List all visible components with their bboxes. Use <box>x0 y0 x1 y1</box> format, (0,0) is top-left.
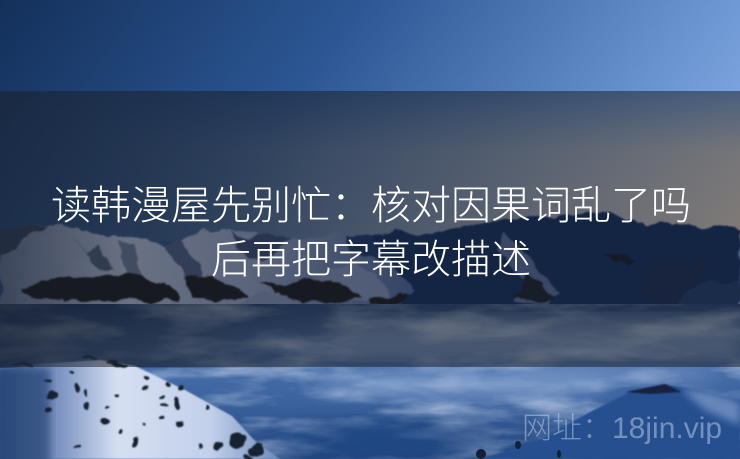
big dark-blue mountain, right <box>372 213 740 312</box>
snowy hill, lower left <box>0 360 280 459</box>
sea of clouds <box>0 304 740 459</box>
title: 后再把字幕改描述 <box>211 238 531 282</box>
watermark: site address: 网址：18jin.vip <box>522 412 722 445</box>
title <box>51 184 691 282</box>
snowy peak, lower right <box>476 384 740 459</box>
foreground snow ridge, centre <box>236 290 305 316</box>
far mountain range, left <box>0 224 420 312</box>
trees on the hill <box>12 356 266 459</box>
translucent dark title band <box>0 91 740 367</box>
dark rock bands, left <box>22 273 436 304</box>
sky <box>0 0 740 320</box>
title: 读韩漫屋先别忙：核对因果词乱了吗 <box>51 184 691 228</box>
